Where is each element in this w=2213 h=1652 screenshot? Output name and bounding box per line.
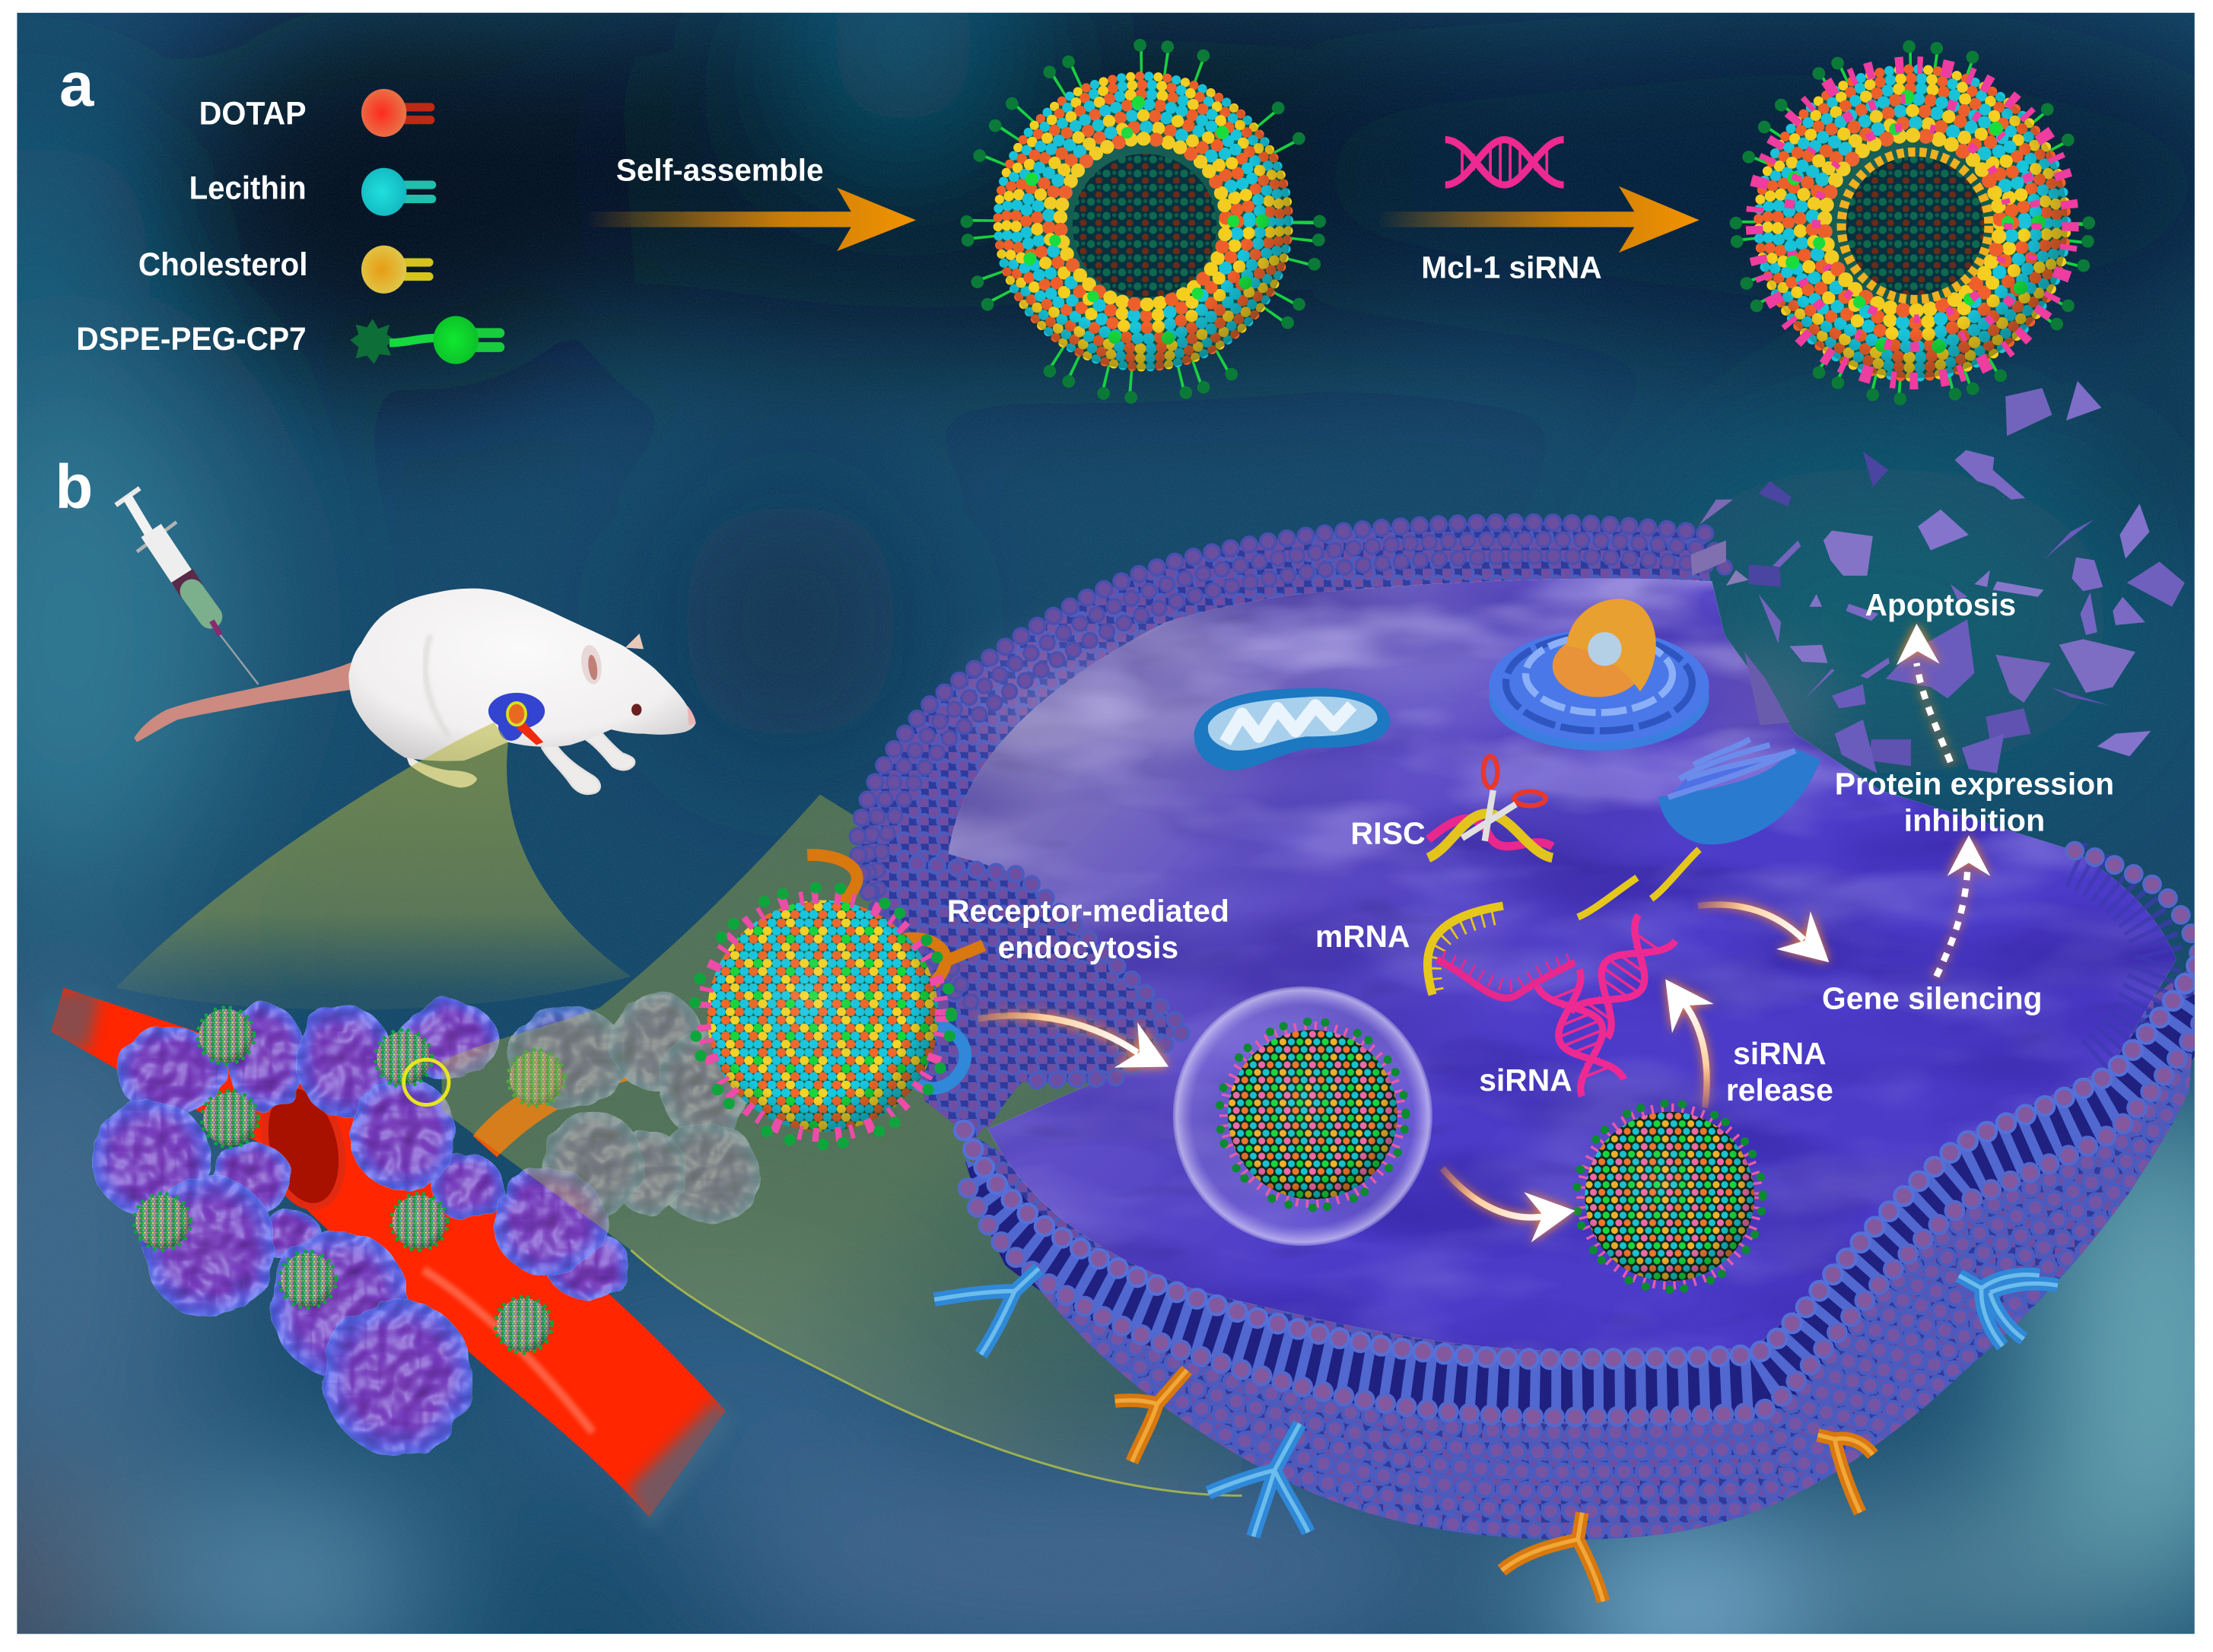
back-wall lipid rows (857, 523, 1725, 1008)
RISC complex with scissors (1428, 756, 1553, 858)
vesicle with nanoparticle (1173, 986, 1432, 1246)
tumor on mouse (488, 693, 545, 745)
scissors (1462, 756, 1545, 841)
arrow: self-assemble (586, 188, 916, 251)
right rim lipid heads (2075, 851, 2200, 959)
component: Lecithin: Lecithin (189, 170, 307, 207)
back wall of membrane (857, 523, 1715, 1129)
label: siRNA release: release (1726, 1072, 1833, 1107)
mitochondrion (1194, 688, 1390, 770)
component: Cholesterol (138, 246, 429, 294)
eye (631, 704, 641, 716)
mRNA strands (1428, 850, 1699, 998)
label: siRNA release (1726, 1036, 1833, 1107)
label: siRNA: siRNA (1479, 1063, 1572, 1098)
yellow selection circle (404, 1060, 449, 1105)
component: DOTAP (199, 89, 431, 137)
beam: tumor zoom from mouse (116, 723, 631, 1010)
label: protein expression inhibition: Protein expression (1835, 766, 2114, 801)
arrow: siRNA release (1645, 964, 1714, 1107)
panel a: formulation (59, 45, 2089, 399)
label: Self-assemble: Self-assemble (616, 152, 824, 187)
endocytosis membrane fold (903, 863, 1185, 1140)
pale highlights on floor (974, 618, 1835, 762)
released nanoparticle (1576, 1104, 1763, 1290)
label: RISC: RISC (1350, 815, 1426, 850)
fold lipid heads (917, 863, 1185, 1081)
label: receptor-mediated endocytosis (947, 893, 1229, 965)
body (348, 589, 696, 761)
blue receptors (917, 1023, 2058, 1536)
nose (688, 706, 696, 726)
arrow: silencing to inhibition (1936, 835, 1990, 977)
siRNA helices (1537, 915, 1675, 1096)
arrow: to gene silencing (1698, 904, 1846, 981)
component: Lecithin (189, 168, 432, 216)
outer wall of membrane (964, 959, 2202, 1539)
arrow: endocytosis (978, 1015, 1180, 1089)
cytoplasm floor (949, 579, 2176, 1352)
hind foot (405, 754, 477, 788)
right inner membrane stripes (2075, 863, 2159, 1061)
far and near forelegs (542, 723, 634, 794)
vessel segment behind beam (473, 1055, 672, 1157)
panel label a: a (59, 50, 94, 119)
label: protein expression inhibition (1835, 766, 2114, 838)
mouse (134, 589, 696, 794)
arrow: inhibition to apoptosis (1895, 623, 1951, 762)
label: gene silencing: Gene silencing (1822, 980, 2042, 1015)
tumor cell cluster (92, 990, 759, 1455)
nucleus with endoplasmic reticulum (1489, 599, 1709, 751)
blood vessel (40, 988, 734, 1531)
nanoparticle binding to cell (695, 888, 951, 1145)
apoptosis membrane fragments (1691, 381, 2185, 774)
panel label b: b (55, 453, 93, 522)
front wall lipid tails and heads (964, 959, 2213, 1551)
orange receptors (807, 855, 1873, 1602)
process arrows (978, 623, 1990, 1243)
arrow: siRNA loading (1380, 186, 1699, 253)
tail (134, 662, 353, 742)
liposome (967, 45, 1320, 398)
component: DOTAP: DOTAP (199, 95, 307, 132)
arrow: vesicle to release (1442, 1168, 1579, 1243)
icon: siRNA helix (1445, 140, 1564, 185)
ear (625, 634, 644, 649)
syringe (116, 488, 259, 685)
label: protein expression inhibition: inhibition (1904, 803, 2045, 838)
label: Mcl-1 siRNA: Mcl-1 siRNA (1421, 249, 1602, 284)
label: receptor-mediated endocytosis: Receptor-mediated (947, 893, 1229, 928)
hip shading (425, 635, 449, 736)
cell (857, 523, 2213, 1551)
cell-surface receptors (807, 855, 2058, 1602)
label: siRNA release: siRNA (1733, 1036, 1827, 1071)
label: mRNA: mRNA (1315, 919, 1410, 954)
label: receptor-mediated endocytosis: endocytosis (998, 930, 1178, 965)
component: DSPE-PEG-CP7 (76, 316, 500, 364)
floor texture (903, 564, 2202, 1368)
Golgi apparatus (1658, 739, 1820, 844)
component: DSPE-PEG-CP7: DSPE-PEG-CP7 (76, 321, 307, 357)
siRNA-loaded liposome (1736, 46, 2089, 399)
process labels (947, 587, 2114, 1107)
label: apoptosis: Apoptosis (1865, 587, 2016, 622)
beam: zoom from tumor to cell (442, 794, 1242, 1495)
nanoparticles on tumor (134, 1007, 564, 1353)
component: Cholesterol: Cholesterol (138, 246, 307, 283)
